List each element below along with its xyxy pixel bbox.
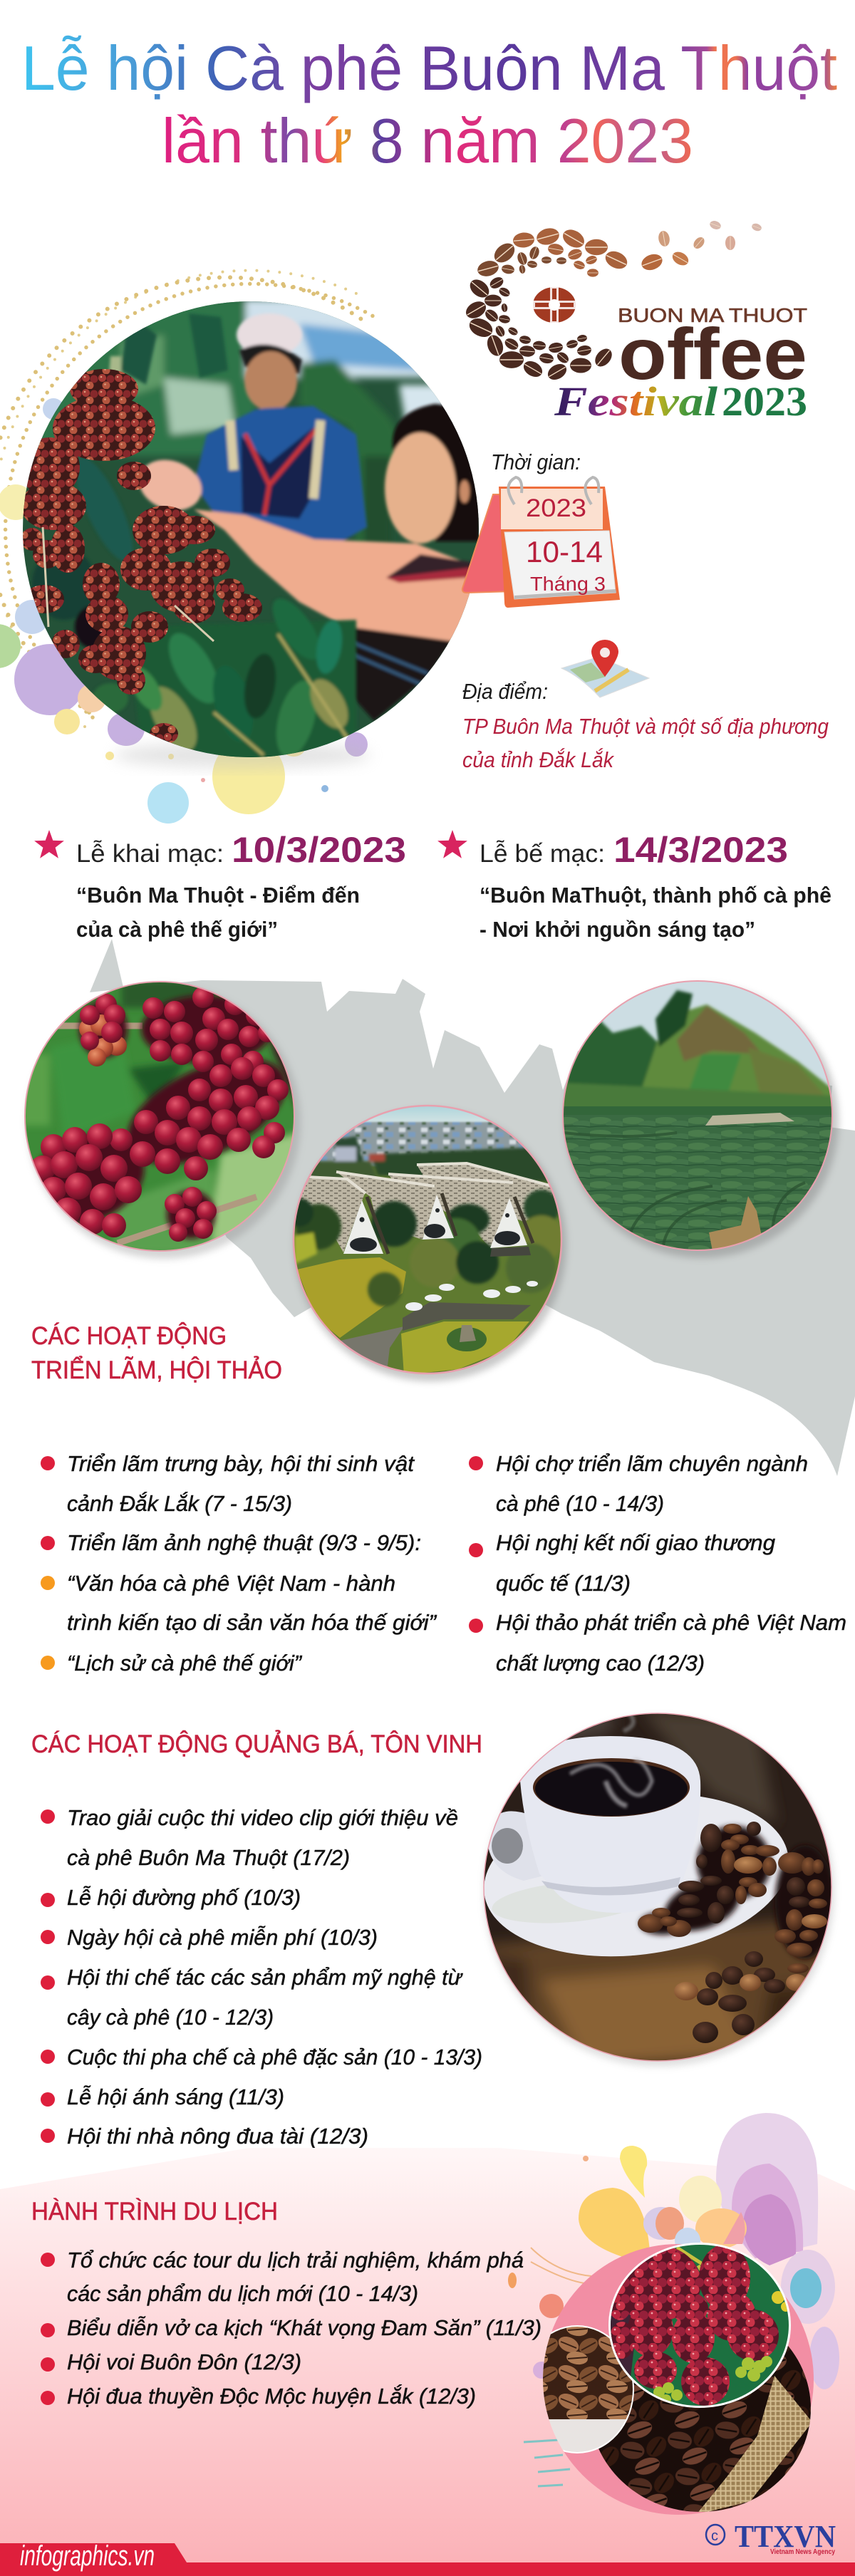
museum gable triangles xyxy=(343,1193,533,1257)
list: Hội thi nhà nông đua tài (12/3) xyxy=(67,2124,368,2149)
roasted beans xyxy=(588,2301,816,2515)
panel: promotion activities xyxy=(31,1730,482,2149)
right list: chất lượng cao (12/3) xyxy=(496,1651,705,1676)
list: các sản phẩm du lịch mới (10 - 14/3) xyxy=(67,2281,418,2306)
title: Lễ hội Cà phê Buôn Ma Thuột xyxy=(21,33,837,103)
right list: Hội thảo phát triển cà phê Việt Nam xyxy=(496,1610,846,1635)
footer bar xyxy=(0,2540,855,2576)
list: Trao giải cuộc thi video clip giới thiệu về xyxy=(67,1805,458,1830)
logo: TTXVN xyxy=(706,2519,836,2556)
list: cây cà phê (10 - 12/3) xyxy=(67,2005,274,2030)
opening ceremony: “Buôn Ma Thuột - Điểm đến xyxy=(76,883,360,908)
icon: calendar: Tháng 3 xyxy=(530,573,606,595)
logo: TTXVN: c xyxy=(711,2528,718,2544)
coffee bean letter C xyxy=(463,226,630,383)
left list xyxy=(41,1451,437,1676)
coffee cup saucer xyxy=(475,1777,798,1973)
location: TP Buôn Ma Thuột và một số địa phương xyxy=(462,714,829,739)
right list: Hội nghị kết nối giao thương xyxy=(496,1530,775,1555)
list xyxy=(41,2248,542,2409)
coffee festival logo: BUON MA THUOT xyxy=(618,304,807,326)
icon: star xyxy=(34,830,64,858)
logo: TTXVN: Vietnam News Agency xyxy=(770,2548,835,2556)
coffee festival logo xyxy=(463,219,807,425)
list: Cuộc thi pha chế cà phê đặc sản (10 - 13/3) xyxy=(67,2045,482,2069)
list: Lễ hội đường phố (10/3) xyxy=(67,1885,301,1910)
list: Biểu diễn vở ca kịch “Khát vọng Đam Săn” (11/3) xyxy=(67,2315,542,2340)
emblem xyxy=(533,287,576,323)
museum walls xyxy=(296,1163,552,1252)
list xyxy=(41,1805,482,2149)
list: Hội voi Buôn Đôn (12/3) xyxy=(67,2349,301,2374)
coffee berry clusters xyxy=(20,369,262,744)
icon: star xyxy=(437,830,467,858)
closing ceremony: - Nơi khởi nguồn sáng tạo” xyxy=(480,917,755,942)
panel: tourism journey xyxy=(0,2113,855,2576)
opening ceremony xyxy=(34,830,406,942)
left list: “Văn hóa cà phê Việt Nam - hành xyxy=(67,1571,395,1596)
list: Tổ chức các tour du lịch trải nghiệm, khám phá xyxy=(67,2248,524,2273)
dark backing behind berries xyxy=(14,995,302,1240)
logo: TTXVN: TTXVN xyxy=(735,2519,836,2554)
heading xyxy=(31,1321,282,1384)
left list: Triển lãm ảnh nghệ thuật (9/3 - 9/5): xyxy=(67,1530,421,1555)
closing ceremony: Lễ bế mạc: xyxy=(480,840,605,868)
photo: coffee museum building xyxy=(285,1103,566,1381)
panel: exhibitions and conferences xyxy=(31,1321,846,1676)
lawns and path xyxy=(297,1257,406,1338)
list: Lễ hội ánh sáng (11/3) xyxy=(67,2084,284,2109)
opening ceremony: của cà phê thế giới” xyxy=(76,917,278,942)
coffee festival logo: offee xyxy=(618,313,807,395)
left list: trình kiến tạo di sản văn hóa thế giới” xyxy=(67,1610,437,1635)
pink background xyxy=(0,2148,855,2576)
icon: calendar: 10-14 xyxy=(526,535,603,568)
calendar rings xyxy=(508,477,598,504)
location: Địa điểm: xyxy=(462,679,548,704)
bowl of beans xyxy=(520,2324,641,2454)
title xyxy=(21,33,837,176)
closing ceremony xyxy=(437,830,831,942)
icon: calendar: 2023 xyxy=(526,494,586,522)
icon: calendar xyxy=(462,477,620,608)
closing ceremony: 14/3/2023 xyxy=(613,830,788,870)
foreground leaves xyxy=(32,450,356,762)
closing ceremony: “Buôn MaThuột, thành phố cà phê xyxy=(480,883,831,908)
heading: CÁC HOẠT ĐỘNG QUẢNG BÁ, TÔN VINH xyxy=(31,1730,482,1758)
heading: HÀNH TRÌNH DU LỊCH xyxy=(31,2198,278,2226)
heading: CÁC HOẠT ĐỘNG xyxy=(31,1321,227,1350)
decorative blobs xyxy=(508,2113,839,2486)
decorative bubbles around main photo xyxy=(0,271,373,824)
location: của tỉnh Đắk Lắk xyxy=(462,747,614,772)
time label: Thời gian: xyxy=(491,450,581,474)
list: Hội thi chế tác các sản phẩm mỹ nghệ từ xyxy=(67,1965,463,1990)
list: Ngày hội cà phê miễn phí (10/3) xyxy=(67,1925,378,1950)
right list: quốc tế (11/3) xyxy=(496,1571,631,1596)
location xyxy=(462,679,829,772)
cup handle xyxy=(487,1811,552,1881)
list: cà phê Buôn Ma Thuột (17/2) xyxy=(67,1845,350,1870)
heading: TRIỂN LÃM, HỘI THẢO xyxy=(31,1356,282,1384)
main photo: farmers picking coffee xyxy=(20,299,488,762)
left list: cảnh Đắk Lắk (7 - 15/3) xyxy=(67,1491,292,1516)
parasols xyxy=(405,1281,538,1311)
opening ceremony: Lễ khai mạc: xyxy=(76,840,224,868)
left list: Triển lãm trưng bày, hội thi sinh vật xyxy=(67,1451,415,1476)
footer bar: infographics.vn xyxy=(20,2540,155,2572)
photo: coffee berries xyxy=(14,980,302,1259)
title: lần thứ 8 năm 2023 xyxy=(162,105,693,176)
coffee festival logo: 2023 xyxy=(722,378,807,425)
icon: map pin xyxy=(561,640,649,697)
collage of coffee photos xyxy=(520,2240,816,2515)
grey map silhouette xyxy=(90,939,855,1476)
right list: Hội chợ triển lãm chuyên ngành xyxy=(496,1451,808,1476)
cup body xyxy=(520,1736,700,1913)
scattered beans xyxy=(639,219,762,273)
photo: hill and tea fields xyxy=(559,977,839,1259)
right list: cà phê (10 - 14/3) xyxy=(496,1491,664,1516)
coffee festival logo: Festival xyxy=(554,378,718,425)
list: Hội đua thuyền Độc Mộc huyện Lắk (12/3) xyxy=(67,2384,476,2409)
coffee beans xyxy=(640,1826,835,1959)
photo: coffee cup xyxy=(475,1710,837,2067)
opening ceremony: 10/3/2023 xyxy=(232,830,406,870)
coffee cherries xyxy=(608,2243,791,2408)
right list xyxy=(469,1451,846,1676)
left list: “Lịch sử cà phê thế giới” xyxy=(67,1651,303,1676)
